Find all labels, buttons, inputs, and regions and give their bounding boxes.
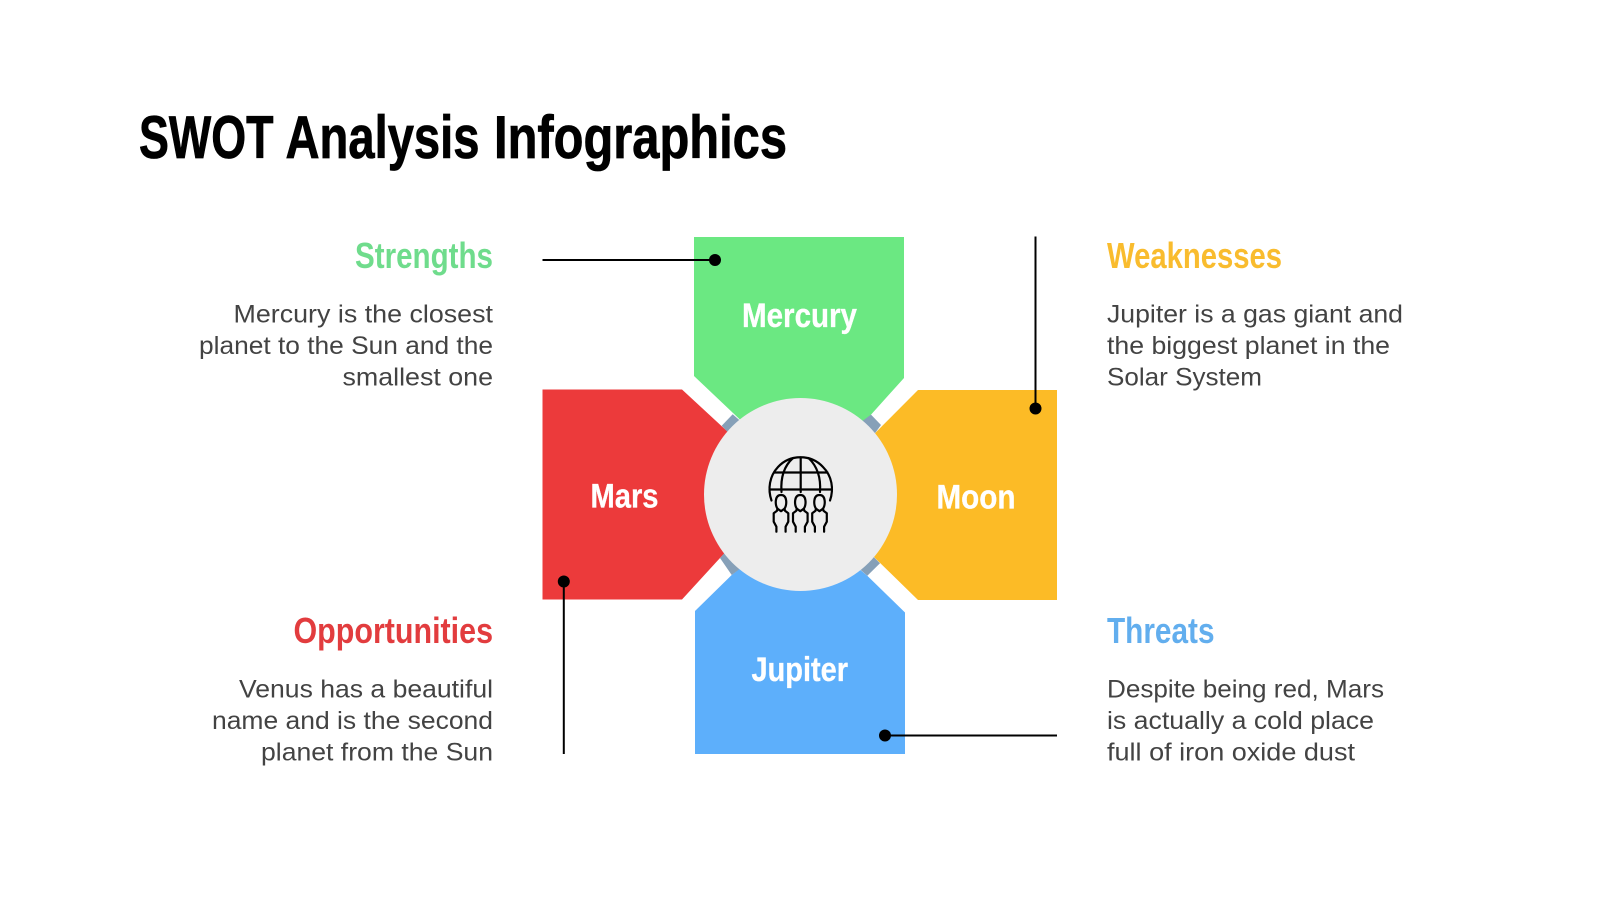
title: SWOT xyxy=(139,104,274,171)
text block: weaknesses description: the biggest planet in the xyxy=(1107,332,1390,360)
text block: threats description: is actually a cold place xyxy=(1107,707,1374,735)
panel: Moon xyxy=(820,390,1057,600)
text block: threats description xyxy=(1107,676,1384,766)
text block: strengths description: planet to the Sun and the xyxy=(199,332,493,360)
title: Infographics xyxy=(494,104,787,171)
center circle xyxy=(704,398,897,591)
heading: weaknesses: Weaknesses xyxy=(1107,235,1282,276)
heading: strengths: Strengths xyxy=(355,235,493,276)
label: Jupiter: Jupiter xyxy=(752,651,848,689)
title xyxy=(139,104,787,171)
panel: threats text xyxy=(1107,610,1384,766)
panel: Mercury xyxy=(694,237,904,480)
title: Analysis xyxy=(286,104,480,171)
text block: threats description: Despite being red, Mars xyxy=(1107,676,1384,704)
heading: opportunities: Opportunities xyxy=(294,610,493,651)
text block: weaknesses description xyxy=(1107,300,1403,392)
text block: weaknesses description: Jupiter is a gas giant and xyxy=(1107,300,1403,328)
label: Mars: Mars xyxy=(590,478,658,516)
label: Mercury: Mercury xyxy=(742,297,857,335)
panel: weaknesses text xyxy=(1107,235,1403,392)
text block: strengths description xyxy=(199,300,493,392)
panel: strengths text xyxy=(199,235,493,392)
connector: strengths xyxy=(542,254,721,266)
gap accents xyxy=(720,414,881,576)
text block: threats description: full of iron oxide dust xyxy=(1107,738,1355,766)
icon: globe with three people xyxy=(770,457,832,532)
text block: weaknesses description: Solar System xyxy=(1107,364,1262,392)
text block: opportunities description: planet from the Sun xyxy=(261,738,493,766)
text block: strengths description: Mercury is the closest xyxy=(234,300,493,328)
panel: opportunities text xyxy=(212,610,493,766)
connector: opportunities xyxy=(558,576,570,754)
connector: threats xyxy=(879,730,1057,742)
text block: opportunities description: Venus has a beautiful xyxy=(239,676,493,704)
text block: opportunities description xyxy=(212,676,493,766)
panel: Mars xyxy=(542,390,780,600)
text block: strengths description: smallest one xyxy=(342,364,493,392)
heading: threats: Threats xyxy=(1107,610,1214,651)
text block: opportunities description: name and is the second xyxy=(212,707,493,735)
diagram: SWOT cross xyxy=(542,237,1057,754)
connector: weaknesses xyxy=(1030,236,1042,414)
label: Moon: Moon xyxy=(936,478,1016,516)
panel: Jupiter xyxy=(695,520,905,754)
